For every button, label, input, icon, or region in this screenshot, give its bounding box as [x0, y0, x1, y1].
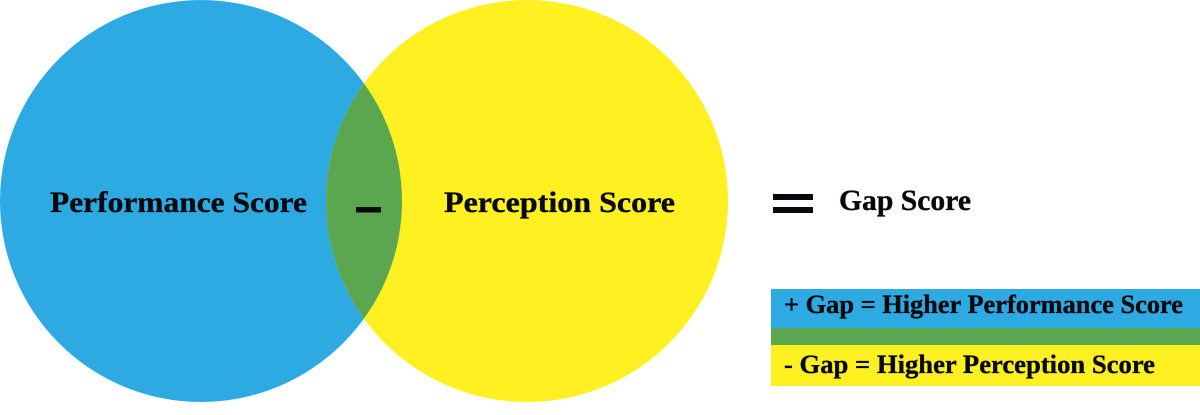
legend	[771, 289, 1200, 386]
label: performance score: Performance Score	[50, 186, 307, 219]
legend text: negative gap: - Gap = Higher Perception Score	[784, 350, 1155, 379]
icon: equals sign	[773, 194, 813, 213]
icon: minus sign	[356, 207, 381, 212]
legend band: green	[771, 328, 1200, 345]
label: gap score: Gap Score	[839, 184, 971, 217]
label: perception score: Perception Score	[444, 186, 675, 219]
circle: perception score	[326, 0, 728, 402]
overlap: green lens	[326, 84, 402, 318]
legend band: blue	[771, 289, 1200, 328]
circle: performance score	[0, 0, 402, 402]
legend text: positive gap: + Gap = Higher Performance Score	[784, 290, 1183, 319]
legend band: yellow	[771, 345, 1200, 386]
